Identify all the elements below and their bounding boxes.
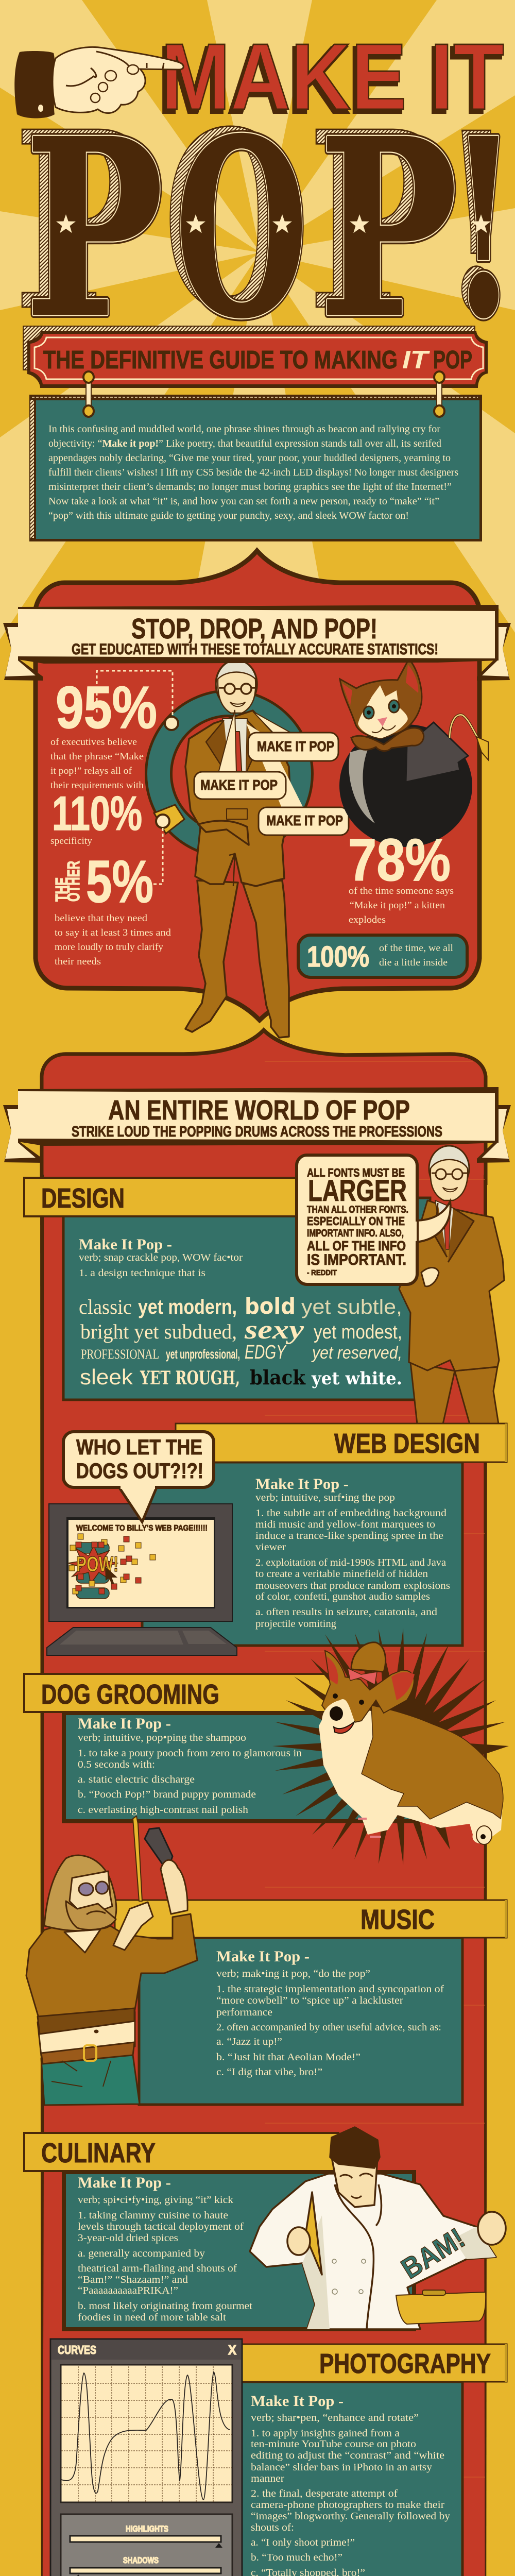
text: BAM!: BAM! — [396, 2222, 470, 2285]
title: POP!: P — [319, 86, 458, 372]
font sampler text: black — [250, 1366, 306, 1389]
title: POP!: P — [13, 78, 152, 365]
dog grooming definition text: 0.5 seconds with: — [78, 1759, 155, 1770]
title: POP!: P — [25, 86, 164, 372]
culinary definition text: theatrical arm-flailing and shouts of — [78, 2263, 237, 2274]
stat: 78%: “Make it pop!” a kitten — [350, 900, 445, 911]
sign title text: POP — [433, 346, 472, 374]
photography definition text: balance” slider bars in iPhoto in an artsy — [251, 2462, 432, 2473]
photography definition text: verb; shar•pen, “enhance and rotate” — [251, 2412, 419, 2424]
stat: the other 5%: more loudly to truly clarify — [55, 942, 164, 953]
icon: pointing hand — [14, 47, 183, 118]
dog grooming definition text: 1. to take a pouty pooch from zero to glamorous in — [78, 1748, 302, 1759]
callout: all fonts must be larger: THAN ALL OTHER FONTS. — [307, 1205, 408, 1215]
callout: all fonts must be larger: IS IMPORTANT. — [307, 1251, 406, 1268]
font sampler text: yet reserved, — [311, 1343, 402, 1363]
title: POP!: O — [164, 78, 297, 365]
font sampler text: bright yet subdued, — [80, 1320, 237, 1343]
design definition text — [79, 1236, 243, 1279]
web design definition text: mouseovers that produce random explosions — [255, 1580, 450, 1591]
illustration: computer with web page: WELCOME TO BILLY'S WEB PAGE!!!!!! — [76, 1524, 208, 1533]
callout: who let the dogs out — [63, 1432, 214, 1522]
dog grooming definition text — [78, 1715, 302, 1816]
heading bar: dog grooming — [24, 1674, 333, 1712]
callout: all fonts must be larger: LARGER — [308, 1174, 407, 1208]
callout: all fonts must be larger: ALL OF THE INFO — [307, 1238, 406, 1253]
stat: 110%: specificity — [50, 836, 93, 846]
speech bubbles: make it pop: MAKE IT POP — [200, 777, 278, 793]
stat: 95%: that the phrase “Make — [50, 751, 144, 762]
font sampler text: yet white. — [311, 1368, 402, 1389]
intro text: “pop” with this ultimate guide to getting your punchy, sexy, and sleek WOW factor on! — [48, 510, 409, 521]
font sampler text: yet modest, — [314, 1321, 402, 1343]
photography definition text: shouts of: — [251, 2522, 294, 2533]
chart: teal ring — [97, 671, 300, 884]
font sampler text: sleek — [80, 1365, 133, 1389]
web design definition text: Make It Pop - — [255, 1476, 349, 1493]
font sampler text: yet subtle, — [301, 1296, 402, 1318]
heading bar: music: MUSIC — [360, 1904, 435, 1935]
stat: the other 5%: to say it at least 3 times and — [55, 927, 171, 938]
speech bubbles: make it pop: MAKE IT POP — [257, 738, 334, 754]
dog grooming definition text: verb; intuitive, pop•ping the shampoo — [78, 1732, 246, 1743]
banner: stop, drop, and pop: STOP, DROP, AND POP! — [131, 613, 377, 645]
section: web design — [47, 1423, 507, 1655]
photography definition text: “images” blogworthy. Generally followed by — [251, 2511, 450, 2522]
stat: 78%: of the time someone says — [349, 886, 454, 896]
web design definition text: a. often results in seizure, catatonia, and — [255, 1606, 437, 1618]
intro text: objectivity: “Make it pop!” Like poetry, that beautiful expression stands tall over all, its serifed — [48, 438, 441, 449]
highlights and shadows sliders — [61, 2514, 232, 2576]
stat: the other 5%: OTHER — [64, 861, 83, 902]
section: music — [26, 1816, 507, 2105]
illustration: man in suit with speech bubble — [399, 1146, 504, 1424]
culinary definition text: “Bam!” “Shazaam!” and — [78, 2274, 188, 2285]
stat: 100% callout: 100% — [307, 940, 369, 973]
music definition text: Make It Pop - — [216, 1948, 310, 1965]
font sampler text: YET ROUGH, — [140, 1367, 240, 1389]
heading bar: culinary — [24, 2133, 338, 2171]
illustration: computer with web page — [47, 1504, 237, 1655]
design definition text: 1. a design technique that is — [79, 1267, 205, 1279]
music definition text: c. “I dig that vibe, bro!” — [216, 2066, 322, 2078]
intro text — [48, 423, 458, 521]
panel: professions shield — [40, 1028, 487, 2576]
photography definition text: a. “I only shoot prime!” — [251, 2537, 355, 2548]
photography definition text: camera-phone photographers to make their — [251, 2499, 444, 2511]
photography definition text: manner — [251, 2473, 284, 2484]
stat: the other 5%: THE — [52, 877, 71, 902]
photography definition text: 1. to apply insights gained from a — [251, 2428, 400, 2439]
culinary definition text: foodies in need of more table salt — [78, 2312, 226, 2323]
banner: an entire world of pop: AN ENTIRE WORLD OF POP — [108, 1095, 410, 1126]
design definition text: Make It Pop - — [79, 1236, 172, 1253]
music definition text: performance — [216, 2007, 272, 2018]
callout: all fonts must be larger: IMPORTANT INFO. ALSO, — [307, 1228, 404, 1239]
music definition text: verb; mak•ing it pop, “do the pop” — [216, 1968, 370, 1979]
web design definition text: midi music and yellow-font marquees to — [255, 1519, 435, 1530]
heading bar: photography — [242, 2344, 507, 2382]
panel: intro body sign — [29, 395, 482, 541]
section: culinary — [24, 2127, 506, 2329]
intro text: misinterpret their client’s demands; no longer must boring graphics see the light of the Internet!” — [48, 481, 452, 493]
title: POP!: O — [175, 86, 308, 372]
photography definition text: ten-minute YouTube course on photo — [251, 2438, 416, 2450]
font sampler text — [79, 1293, 402, 1389]
culinary definition text: Make It Pop - — [78, 2174, 171, 2191]
panel: design definition — [63, 1198, 430, 1400]
illustration: spiky corgi — [272, 1628, 509, 1865]
stat: the other 5%: their needs — [55, 956, 101, 967]
section: photography — [50, 2339, 507, 2576]
chart: wild curve — [61, 2372, 230, 2500]
font sampler text: classic — [79, 1295, 132, 1318]
sign title text: THE DEFINITIVE GUIDE TO MAKING — [43, 346, 398, 374]
font sampler text: PROFESSIONAL — [81, 1347, 159, 1362]
font sampler text: sexy — [244, 1315, 304, 1345]
illustration: cowbell musician — [26, 1816, 197, 2105]
callout: who let the dogs out: DOGS OUT?!?! — [76, 1459, 203, 1483]
stat: 95% — [50, 674, 157, 791]
illustration: curves window — [50, 2339, 242, 2576]
font sampler text: yet modern, — [138, 1296, 237, 1318]
sign hangers — [83, 371, 444, 417]
title: POP!: P — [25, 86, 164, 372]
web design definition text — [255, 1476, 450, 1630]
web design definition text: 2. exploitation of mid-1990s HTML and Java — [255, 1557, 446, 1568]
intro text: fulfill their clients’ wishes! I lift my CS5 beside the 42-inch LED displays! No longer must designers — [48, 467, 458, 478]
web design definition text: 1. the subtle art of embedding background — [255, 1507, 447, 1519]
heading bar: music — [115, 1900, 507, 1938]
stat: 110%: 110% — [52, 786, 142, 840]
music definition text: a. “Jazz it up!” — [216, 2036, 282, 2047]
sign title text: IT — [402, 346, 431, 374]
speech bubbles: make it pop: MAKE IT POP — [266, 812, 343, 828]
music definition text — [216, 1948, 444, 2078]
stat: the other 5%: believe that they need — [55, 913, 148, 924]
stat: 78% — [348, 826, 454, 925]
web design definition text: verb; intuitive, surf•ing the pop — [255, 1492, 395, 1503]
culinary definition text — [78, 2174, 252, 2323]
callout: all fonts must be larger — [297, 1155, 451, 1284]
culinary definition text: “PaaaaaaaaaaPRIKA!” — [78, 2285, 178, 2296]
callout: all fonts must be larger: ESPECIALLY ON THE — [307, 1214, 405, 1228]
web design definition text: to create a veritable minefield of hidden — [255, 1568, 428, 1580]
music definition text: 1. the strategic implementation and syncopation of — [216, 1984, 444, 1995]
title: POP!: P — [307, 78, 447, 365]
panel: dog grooming definition — [64, 1713, 414, 1821]
highlights and shadows sliders: SHADOWS — [123, 2555, 159, 2565]
font sampler text: EDGY — [245, 1342, 287, 1363]
illustration: man in suit — [185, 660, 290, 1038]
photography definition text: b. “Too much echo!” — [251, 2552, 342, 2563]
section: dog grooming — [24, 1628, 509, 1865]
font sampler text: bold — [245, 1293, 296, 1319]
banner: an entire world of pop — [3, 1087, 511, 1163]
music definition text: 2. often accompanied by other useful advice, such as: — [216, 2022, 441, 2033]
stat: 110% — [50, 786, 142, 846]
heading bar: design — [24, 1178, 333, 1216]
speech bubbles: make it pop — [194, 710, 349, 835]
stat: 95%: of executives believe — [50, 737, 137, 748]
heading bar: culinary: CULINARY — [41, 2138, 156, 2168]
stat: 95%: their requirements with — [50, 780, 144, 791]
title: POP!: P — [25, 86, 164, 372]
panel: photography definition — [238, 2382, 462, 2576]
culinary definition text: b. most likely originating from gourmet — [78, 2300, 252, 2312]
illustration: computer with web page: POW! — [76, 1552, 118, 1576]
music definition text: b. “Just hit that Aeolian Mode!” — [216, 2052, 360, 2063]
stat: the other 5%: 5% — [86, 848, 153, 915]
panel: music definition — [139, 1938, 462, 2105]
photography definition text: Make It Pop - — [251, 2393, 344, 2410]
title: POP!: P — [319, 86, 458, 372]
stat: 95%: 95% — [56, 674, 157, 741]
heading bar: web design — [176, 1423, 507, 1462]
section: design — [24, 1146, 504, 1424]
design definition text: verb; snap crackle pop, WOW fac•tor — [79, 1252, 243, 1263]
dog grooming definition text: Make It Pop - — [78, 1715, 171, 1732]
stat: 100% callout — [298, 935, 467, 977]
banner: stop, drop, and pop — [3, 605, 511, 681]
stat: 78%: 78% — [348, 826, 451, 893]
photography definition text: 2. the final, desperate attempt of — [251, 2488, 398, 2499]
title: POP!: O — [175, 86, 308, 372]
culinary definition text: a. generally accompanied by — [78, 2248, 205, 2259]
web design definition text: projectile vomiting — [255, 1618, 336, 1630]
culinary definition text: 1. taking clammy cuisine to haute — [78, 2210, 228, 2221]
stat: 78%: explodes — [349, 914, 386, 925]
stat: the other 5% — [52, 848, 171, 967]
heading bar: web design: WEB DESIGN — [334, 1428, 480, 1459]
illustration: kitten on bomb — [339, 659, 488, 847]
culinary definition text: levels through tactical deployment of — [78, 2221, 244, 2232]
intro text: appendages nobly declaring, “Give me your tired, your poor, your huddled designers, yearning to — [48, 452, 451, 464]
highlights and shadows sliders: HIGHLIGHTS — [126, 2524, 168, 2534]
photography definition text — [251, 2393, 450, 2576]
dog grooming definition text: b. “Pooch Pop!” brand puppy pommade — [78, 1789, 256, 1800]
intro text: In this confusing and muddled world, one phrase shines through as beacon and rallying cry for — [48, 423, 440, 435]
title: POP!: P — [319, 86, 458, 372]
illustration: curves window: CURVES — [58, 2343, 96, 2357]
sign: definitive guide subtitle — [23, 326, 488, 388]
title: POP! — [13, 78, 515, 372]
illustration: curves window: X — [228, 2342, 237, 2358]
title: POP!: O — [175, 86, 308, 372]
web design definition text: of color, confetti, gunshot audio samples — [255, 1591, 430, 1602]
stat: 100% callout: of the time, we all — [379, 943, 453, 954]
background sun rays — [0, 0, 515, 681]
stat: 100% callout: die a little inside — [379, 957, 448, 968]
dog grooming definition text: a. static electric discharge — [78, 1774, 195, 1785]
dog grooming definition text: c. everlasting high-contrast nail polish — [78, 1804, 248, 1816]
heading bar: dog grooming: DOG GROOMING — [41, 1679, 219, 1710]
callout: all fonts must be larger: - REDDIT — [307, 1268, 337, 1277]
callout: who let the dogs out: WHO LET THE — [76, 1435, 202, 1459]
music definition text: “more cowbell” to “spice up” a lackluster — [216, 1995, 403, 2006]
illustration: chef — [250, 2127, 506, 2329]
web design definition text: viewer — [255, 1541, 286, 1553]
panel: statistics shield — [36, 551, 488, 1038]
callout: all fonts must be larger: ALL FONTS MUST BE — [307, 1166, 405, 1179]
culinary definition text: verb; spi•ci•fy•ing, giving “it” kick — [78, 2194, 233, 2206]
intro text: Now take a look at what “it” is, and how you can set forth a new person, ready to “make” “it” — [48, 496, 439, 507]
stat: 95%: it pop!” relays all of — [50, 766, 132, 776]
web design definition text: induce a trance-like spending spree in the — [255, 1530, 443, 1541]
photography definition text: editing to adjust the “contrast” and “white — [251, 2450, 444, 2461]
heading bar: design: DESIGN — [41, 1183, 125, 1214]
panel: web design definition — [142, 1462, 462, 1646]
font sampler text: yet unprofessional, — [166, 1346, 240, 1362]
culinary definition text: 3-year-old dried spices — [78, 2232, 178, 2244]
panel: culinary definition — [64, 2172, 414, 2329]
